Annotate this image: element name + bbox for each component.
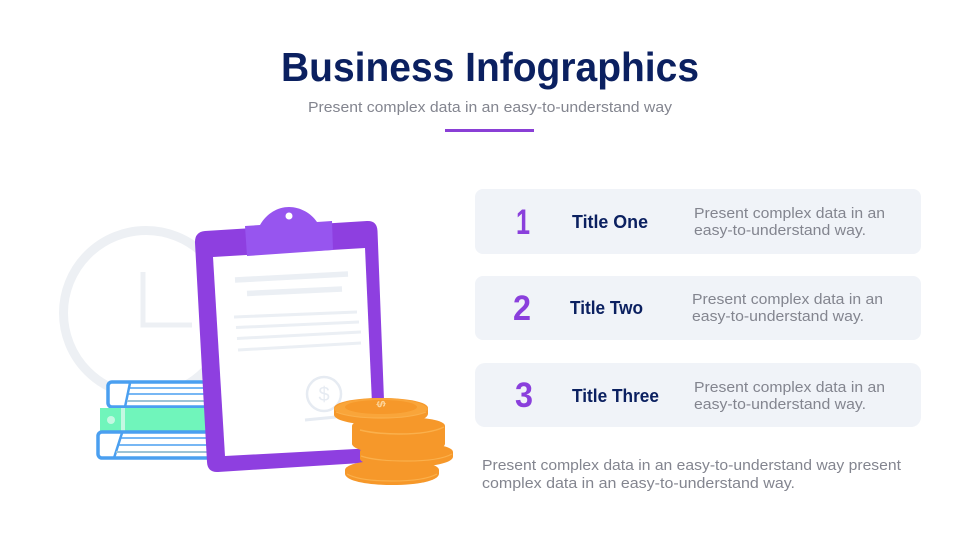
number 2: 2 <box>513 289 531 328</box>
bottom coin <box>345 460 439 485</box>
footer text block: complex data in an easy-to-understand way. <box>482 475 795 492</box>
description two: Present complex data in an <box>692 291 883 308</box>
clip <box>245 207 333 256</box>
description three: Present complex data in an <box>694 379 885 396</box>
heading underline <box>445 129 534 132</box>
paper sheet <box>213 248 374 456</box>
illustration: coin stack <box>334 398 453 485</box>
paper text lines <box>234 274 361 350</box>
dollar seal <box>305 377 341 420</box>
third coin <box>360 443 453 467</box>
clipboard board <box>195 221 386 472</box>
middle book <box>100 408 220 431</box>
description one: easy-to-understand way. <box>694 222 866 239</box>
subtitle: Present complex data in an easy-to-understand way <box>308 99 673 116</box>
illustration: stack of books <box>98 382 220 458</box>
heading: Title Two: Title Two <box>570 298 643 318</box>
second coin <box>352 417 445 454</box>
illustration: clipboard <box>195 207 386 472</box>
panel: item one <box>475 189 921 254</box>
coin dollar mark: $ <box>374 400 388 408</box>
description one: Present complex data in an <box>694 205 885 222</box>
number 1: 1 <box>516 203 530 242</box>
number 3: 3 <box>515 376 533 415</box>
footer text block: Present complex data in an easy-to-understand way present <box>482 457 902 474</box>
heading: Title One: Title One <box>572 212 648 232</box>
title: Business Infographics <box>281 44 699 90</box>
panel: item two <box>475 276 921 340</box>
top book <box>108 382 218 407</box>
heading: Title Three: Title Three <box>572 386 659 406</box>
description three: easy-to-understand way. <box>694 396 866 413</box>
dollar seal: $ <box>318 384 330 406</box>
panel: item three <box>475 363 921 427</box>
description two: easy-to-understand way. <box>692 308 864 325</box>
illustration: clock <box>64 230 228 396</box>
bottom book <box>98 432 218 458</box>
